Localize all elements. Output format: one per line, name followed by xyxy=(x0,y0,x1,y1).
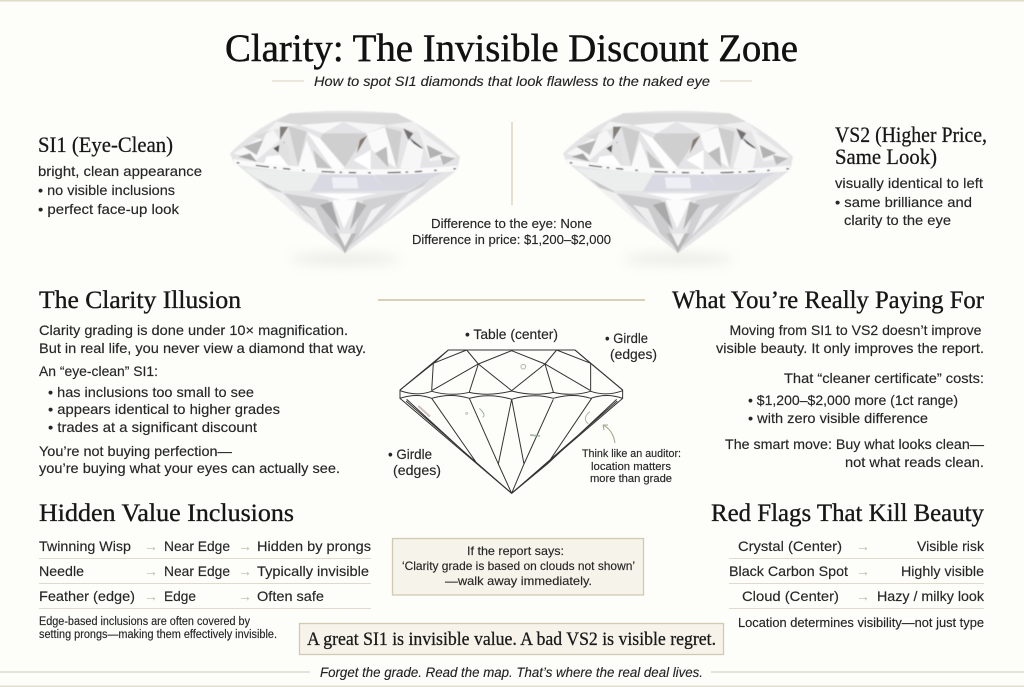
callout: think like an auditor xyxy=(582,448,681,485)
comparison caption: Difference to the eye: None xyxy=(431,216,592,231)
table row: Crystal xyxy=(738,538,985,554)
panel: VS2 label: VS2 (Higher Price, xyxy=(835,122,987,147)
body text: You’re not buying perfection— xyxy=(39,443,232,459)
image: SI1 diamond xyxy=(230,111,460,264)
table row: Feather: → xyxy=(238,588,252,604)
arrow: auditor note xyxy=(603,425,615,443)
footnote xyxy=(39,616,277,641)
panel: VS2 label: visually identical to left xyxy=(835,175,983,191)
table row: Black Carbon Spot: → xyxy=(856,563,870,579)
label: table: • Table (center) xyxy=(465,326,558,342)
table row: Crystal: Visible risk xyxy=(917,538,985,554)
table row: Cloud xyxy=(742,588,985,604)
table row: Feather: → xyxy=(144,588,158,604)
panel: SI1 label: • perfect face-up look xyxy=(38,201,180,217)
callout: key takeaway xyxy=(300,624,724,654)
table row: Cloud: → xyxy=(856,588,870,604)
table row: Crystal: → xyxy=(856,538,870,554)
label: girdle right: (edges) xyxy=(610,346,657,362)
panel: The Clarity Illusion xyxy=(39,285,366,476)
footnote: setting prongs—making them effectively invisible. xyxy=(39,629,277,641)
table row: Needle: → xyxy=(144,563,158,579)
body text: • appears identical to higher grades xyxy=(48,401,280,417)
callout: think like an auditor: more than grade xyxy=(590,473,672,485)
table row: Feather: Feather (edge) xyxy=(39,588,135,604)
footer line: Forget the grade. Read the map. That’s where the real deal lives. xyxy=(320,665,703,680)
panel: VS2 label: Same Look) xyxy=(835,144,937,169)
table row: Cloud: Hazy / milky look xyxy=(877,588,985,604)
body text xyxy=(39,322,366,476)
body text: • $1,200–$2,000 more (1ct range) xyxy=(748,392,958,408)
table row: Twinning Wisp xyxy=(39,538,371,554)
label: girdle left: (edges) xyxy=(393,462,441,478)
body text: • trades at a significant discount xyxy=(48,419,257,435)
table row: Cloud: Cloud (Center) xyxy=(742,588,839,604)
table row: Needle: Near Edge xyxy=(164,563,230,579)
callout: think like an auditor: location matters xyxy=(591,461,672,473)
body text: • has inclusions too small to see xyxy=(48,384,254,400)
callout: think like an auditor: Think like an auditor: xyxy=(582,448,681,460)
panel: SI1 label: SI1 (Eye-Clean) xyxy=(38,132,173,157)
panel: VS2 label xyxy=(835,122,987,228)
panel: What You're Really Paying For xyxy=(672,285,984,470)
comparison caption: Difference in price: $1,200–$2,000 xyxy=(412,232,611,247)
table row: Feather: Often safe xyxy=(257,588,324,604)
panel: SI1 label: • no visible inclusions xyxy=(38,182,175,198)
body text: visible beauty. It only improves the report. xyxy=(716,340,984,356)
image: VS2 diamond xyxy=(563,111,793,264)
callout: key takeaway: A great SI1 is invisible value. A bad VS2 is visible regret. xyxy=(307,629,716,650)
table row: Black Carbon Spot: Black Carbon Spot xyxy=(729,563,848,579)
body text: Moving from SI1 to VS2 doesn’t improve xyxy=(730,322,982,338)
table row: Black Carbon Spot: Highly visible xyxy=(901,563,984,579)
title: Clarity: The Invisible Discount Zone xyxy=(225,26,798,70)
body text: not what reads clean. xyxy=(845,454,984,470)
footnote: Edge-based inclusions are often covered by xyxy=(39,616,250,628)
heading: Red Flags That Kill Beauty: Red Flags That Kill Beauty xyxy=(711,498,984,527)
table row: Black Carbon Spot xyxy=(729,563,984,579)
table row: Twinning Wisp: → xyxy=(144,538,158,554)
table row: Twinning Wisp: Near Edge xyxy=(164,538,230,554)
table row: Feather: Edge xyxy=(164,588,196,604)
table row: Crystal: Crystal (Center) xyxy=(738,538,842,554)
note: Location determines visibility—not just type xyxy=(738,615,984,630)
table row: Needle xyxy=(39,563,369,579)
diagram: diamond facet map xyxy=(400,350,623,493)
table row: Twinning Wisp: Hidden by prongs xyxy=(257,538,371,554)
heading: What You're Really Paying For: What You’re Really Paying For xyxy=(672,285,984,314)
callout: report warning: If the report says: xyxy=(467,544,564,558)
subtitle: How to spot SI1 diamonds that look flawless to the naked eye xyxy=(314,74,710,89)
table row: Twinning Wisp: → xyxy=(238,538,252,554)
label: girdle right xyxy=(605,330,657,362)
body text: • with zero visible difference xyxy=(748,410,928,426)
panel: Red Flags That Kill Beauty xyxy=(711,498,985,630)
label: girdle left: • Girdle xyxy=(388,446,432,462)
panel: SI1 label: bright, clean appearance xyxy=(38,163,202,179)
heading: Hidden Value Inclusions: Hidden Value Inclusions xyxy=(39,498,294,527)
callout: report warning: —walk away immediately. xyxy=(445,574,592,588)
table row: Needle: Needle xyxy=(39,563,84,579)
callout: report warning xyxy=(392,538,644,595)
comparison caption xyxy=(412,216,611,247)
body text xyxy=(716,322,984,470)
callout: report warning: ‘Clarity grade is based on clouds not shown’ xyxy=(402,559,635,573)
label: girdle left xyxy=(388,446,441,478)
body text: But in real life, you never view a diamond that way. xyxy=(39,340,366,356)
table row: Twinning Wisp: Twinning Wisp xyxy=(39,538,131,554)
heading: The Clarity Illusion: The Clarity Illusion xyxy=(39,285,241,314)
table row: Needle: Typically invisible xyxy=(257,563,369,579)
table row: Feather xyxy=(39,588,324,604)
panel: VS2 label: clarity to the eye xyxy=(844,212,951,228)
body text: Clarity grading is done under 10× magnification. xyxy=(39,322,348,338)
body text: An “eye-clean” SI1: xyxy=(39,363,158,379)
label: girdle right: • Girdle xyxy=(605,330,648,346)
table row: Needle: → xyxy=(238,563,252,579)
body text: That “cleaner certificate” costs: xyxy=(784,370,984,386)
panel: VS2 label: • same brilliance and xyxy=(835,194,972,210)
panel: Hidden Value Inclusions xyxy=(39,498,371,641)
panel: SI1 label xyxy=(38,132,202,217)
body text: The smart move: Buy what looks clean— xyxy=(725,436,984,452)
body text: you’re buying what your eyes can actually see. xyxy=(39,460,340,476)
